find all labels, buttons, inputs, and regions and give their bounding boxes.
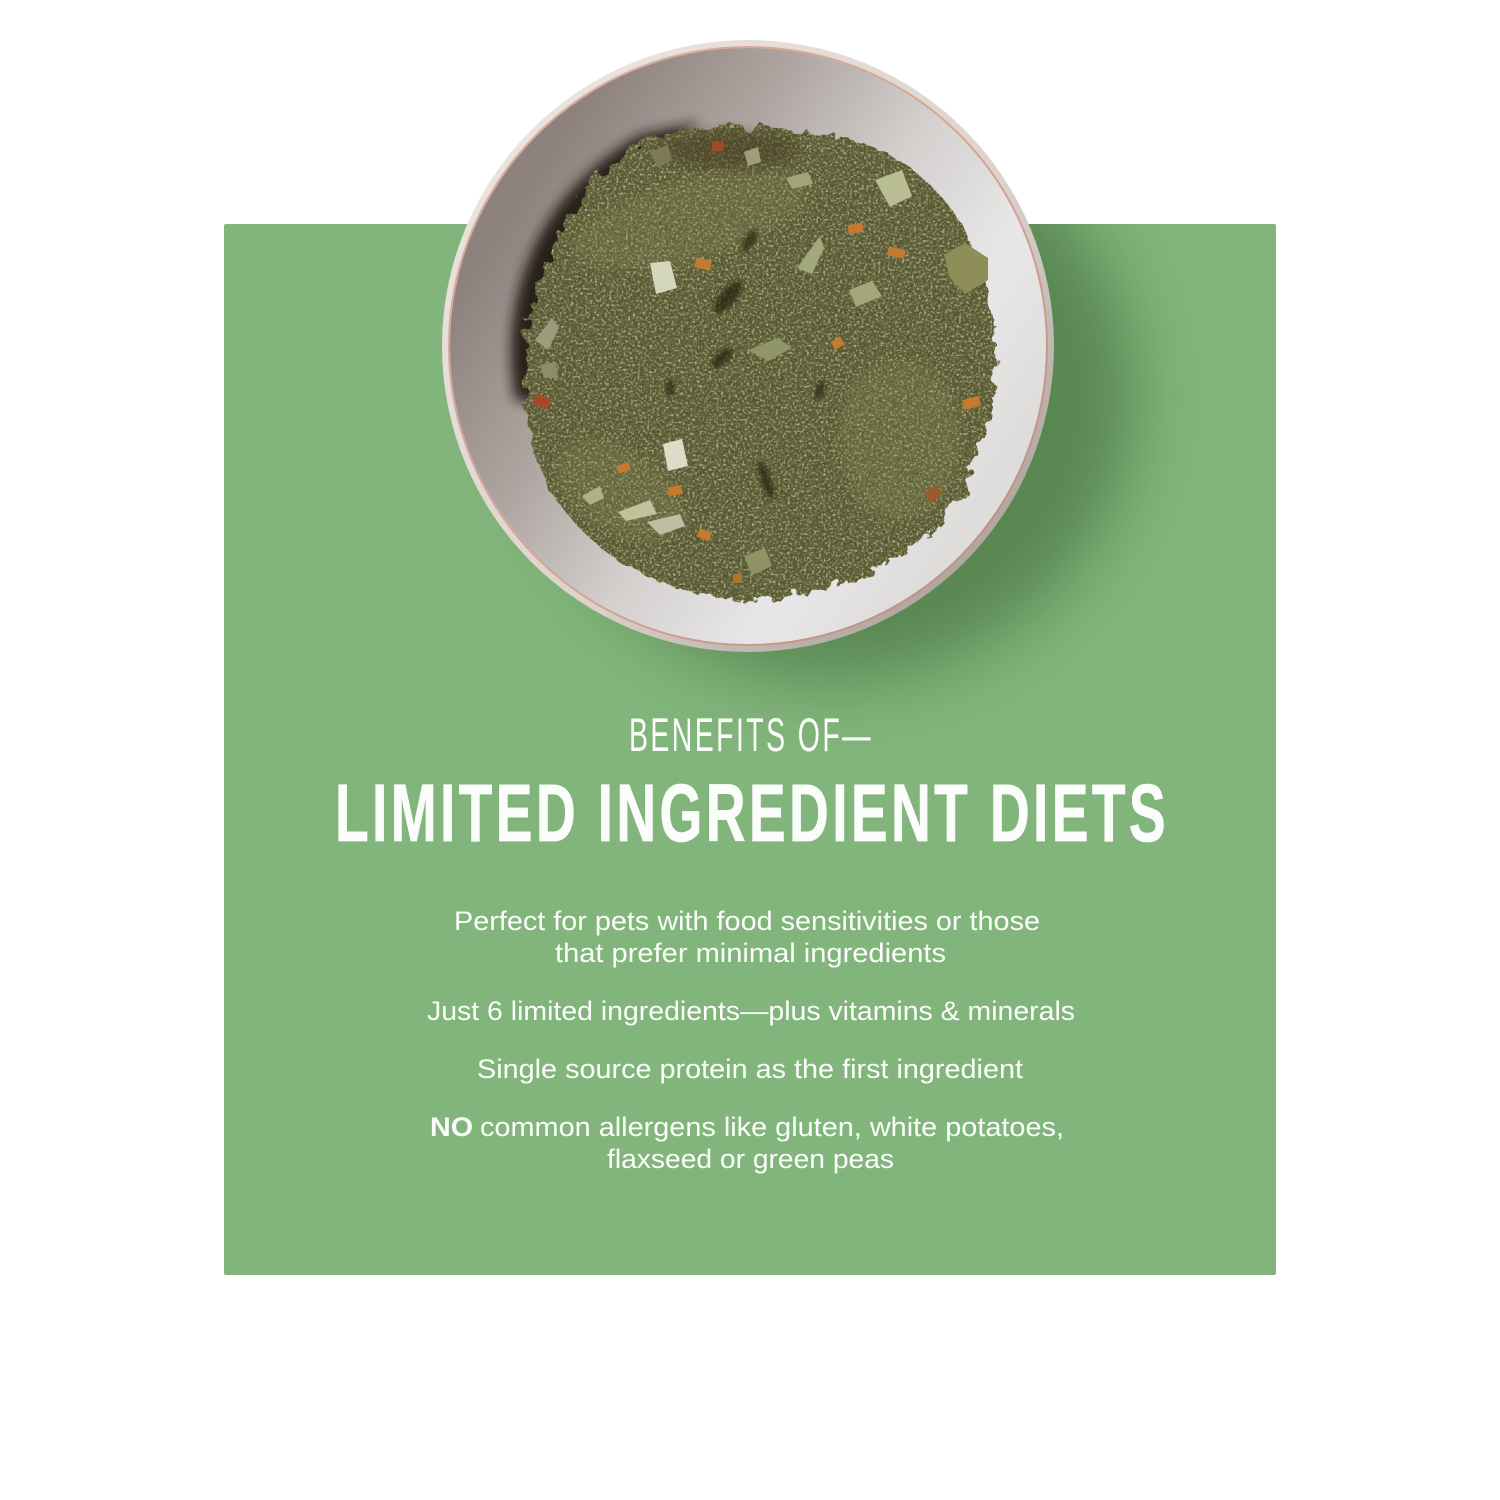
top edge brown tint [660, 132, 800, 168]
lighter mottling [539, 150, 960, 560]
image: bowl of ground food [442, 40, 1054, 652]
bowl outer rim [442, 40, 1054, 652]
dark crevices [666, 227, 827, 501]
rim glaze line [449, 47, 1047, 645]
bowl interior [450, 48, 1046, 644]
benefit 4 [430, 1112, 1064, 1174]
carrot bits [532, 142, 981, 583]
heading: eyebrow: BENEFITS OF— [629, 708, 873, 761]
benefit 3: Single source protein as the first ingredient [477, 1054, 1024, 1084]
bowl drop shadow [598, 224, 1164, 710]
food pile [525, 126, 996, 600]
benefit 1: that prefer minimal ingredients [555, 938, 946, 968]
panel: green background [224, 224, 1276, 1275]
benefit 1 [454, 906, 1040, 968]
benefit 4: NO [430, 1112, 473, 1142]
benefit 4: flaxseed or green peas [607, 1144, 894, 1174]
text block: benefits list [427, 906, 1075, 1174]
benefit 4: common allergens like gluten, white potatoes, [480, 1112, 1064, 1142]
vegetable flakes [535, 145, 988, 575]
benefit 2: Just 6 limited ingredients—plus vitamins & minerals [427, 996, 1075, 1026]
benefit 1: Perfect for pets with food sensitivities or those [454, 906, 1040, 936]
food shadow crescent [511, 122, 700, 405]
